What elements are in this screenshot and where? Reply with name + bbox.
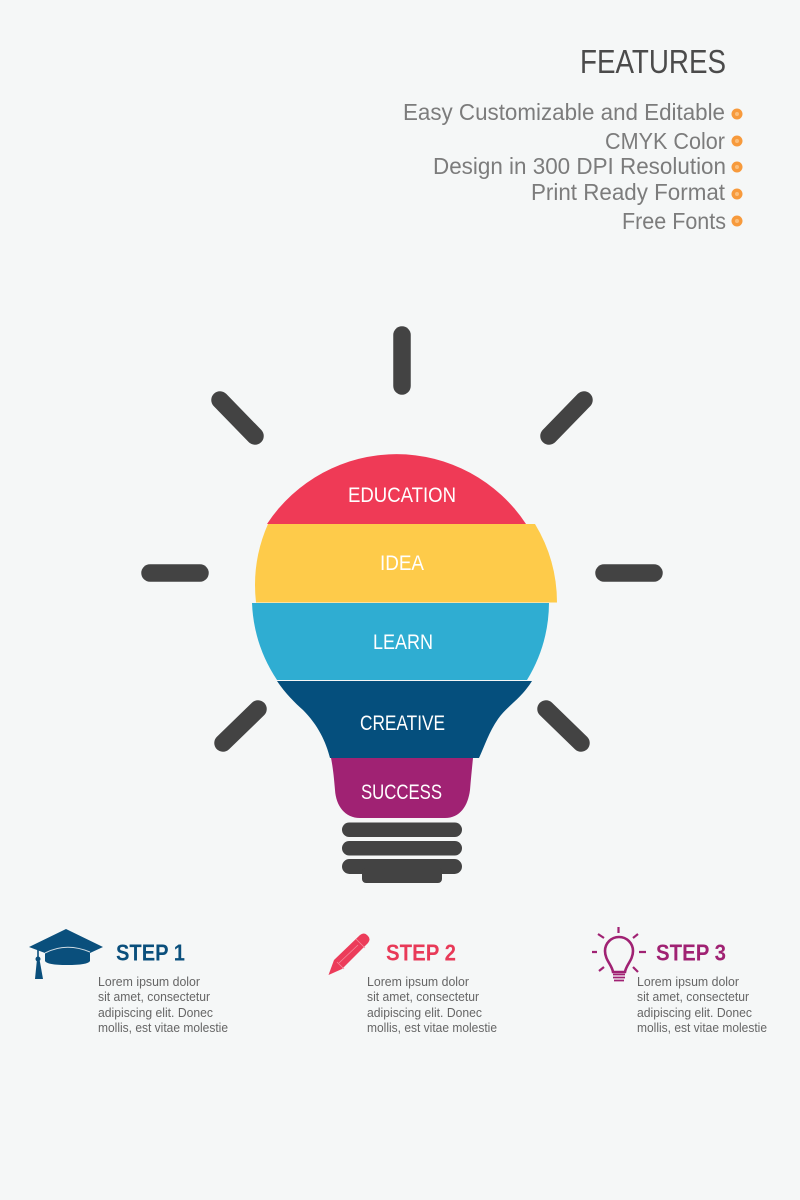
feature: easy customizable: Easy Customizable and Editable [403,99,725,125]
segment: learn [252,603,549,680]
step 2 title: STEP 2 [386,940,456,966]
step 3 text: sit amet, consectetur [637,990,749,1004]
heading: features: FEATURES [580,43,726,80]
feature: cmyk color: CMYK Color [605,128,725,154]
icon: light bulb outline [592,927,646,980]
segment: learn: LEARN [373,631,433,654]
feature: free fonts: Free Fonts [622,208,726,234]
light rays [150,335,654,743]
icon: graduation cap [29,929,103,979]
segment: idea: IDEA [380,552,424,575]
feature: resolution: Design in 300 DPI Resolution [433,153,726,179]
light bulb [252,454,557,883]
step 3 text [637,975,767,1035]
segment: idea [255,524,557,602]
step 1 [29,929,228,1035]
segment: education: EDUCATION [348,484,456,507]
step 2 text: adipiscing elit. Donec [367,1006,482,1020]
step 2 [328,934,497,1035]
segment: creative [277,681,532,758]
segment: success: SUCCESS [361,781,442,804]
bulb base [342,822,462,883]
segment: creative: CREATIVE [360,712,445,735]
step 3 text: mollis, est vitae molestie [637,1021,767,1035]
step 1 title: STEP 1 [116,940,185,966]
step 1 text: Lorem ipsum dolor [98,975,200,989]
step 2 text: Lorem ipsum dolor [367,975,469,989]
segment: education [267,454,526,524]
features list [403,99,742,234]
step 1 text: mollis, est vitae molestie [98,1021,228,1035]
icon: pencil [328,934,370,975]
step 1 text [98,975,228,1035]
step 2 text [367,975,497,1035]
step 3 text: Lorem ipsum dolor [637,975,739,989]
step 3 [592,927,767,1035]
step 3 title: STEP 3 [656,940,726,966]
step 2 text: mollis, est vitae molestie [367,1021,497,1035]
feature: print ready: Print Ready Format [531,179,726,205]
step 1 text: adipiscing elit. Donec [98,1006,213,1020]
step 2 text: sit amet, consectetur [367,990,479,1004]
step 3 text: adipiscing elit. Donec [637,1006,752,1020]
step 1 text: sit amet, consectetur [98,990,210,1004]
segment: success [331,758,473,818]
